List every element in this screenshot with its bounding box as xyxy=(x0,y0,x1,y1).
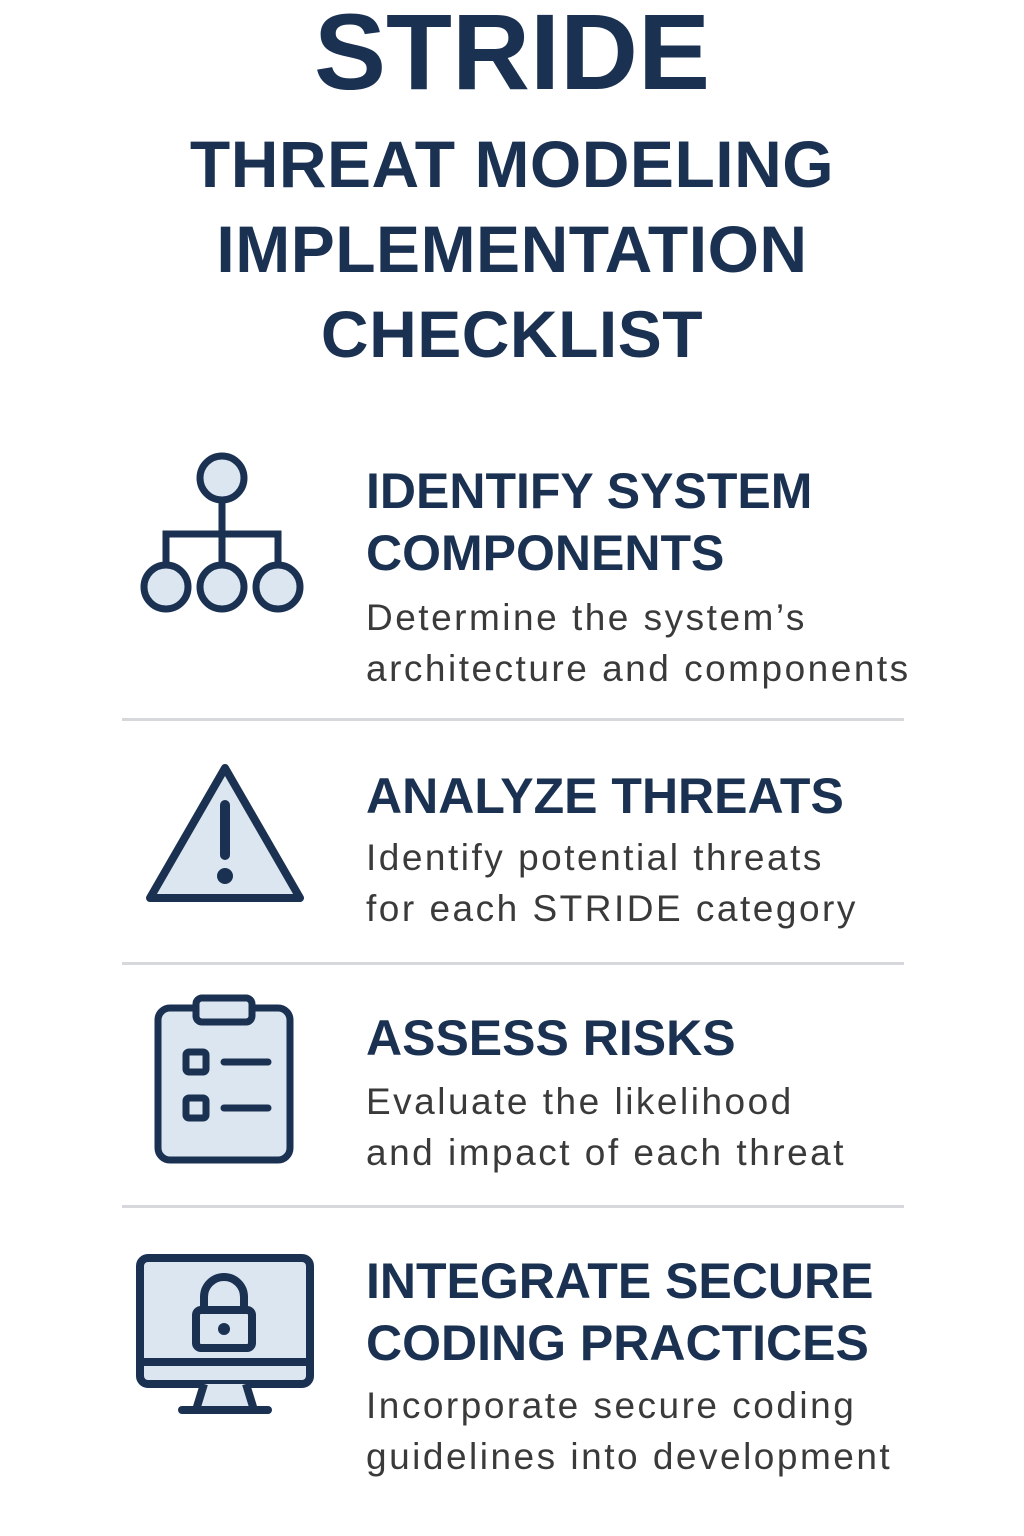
body 2: Identify potential threats xyxy=(366,837,824,878)
section 1 xyxy=(366,463,911,689)
section 3 xyxy=(366,1010,846,1173)
icon: hierarchy xyxy=(140,452,304,612)
body 2: for each STRIDE category xyxy=(366,888,858,929)
body 4: Incorporate secure coding xyxy=(366,1385,856,1426)
heading 4: CODING PRACTICES xyxy=(366,1315,869,1371)
icon: monitor lock xyxy=(136,1254,314,1414)
body 4: guidelines into development xyxy=(366,1436,892,1477)
heading 1 xyxy=(366,463,812,581)
section 2 xyxy=(366,768,858,929)
subtitle: IMPLEMENTATION xyxy=(216,212,808,286)
body 1 xyxy=(366,597,911,689)
icon: warning xyxy=(146,764,304,902)
subtitle: CHECKLIST xyxy=(321,297,703,371)
body 3: and impact of each threat xyxy=(366,1132,846,1173)
body 3 xyxy=(366,1081,846,1173)
heading 2: ANALYZE THREATS xyxy=(366,768,844,824)
body 1: architecture and components xyxy=(366,648,911,689)
section 4 xyxy=(366,1253,892,1477)
body 2 xyxy=(366,837,858,929)
heading 3: ASSESS RISKS xyxy=(366,1010,736,1066)
subtitle: THREAT MODELING xyxy=(190,127,834,201)
heading 4: INTEGRATE SECURE xyxy=(366,1253,873,1309)
body 3: Evaluate the likelihood xyxy=(366,1081,794,1122)
icon: clipboard xyxy=(154,994,294,1164)
body 1: Determine the system’s xyxy=(366,597,807,638)
heading 1: COMPONENTS xyxy=(366,525,724,581)
heading 1: IDENTIFY SYSTEM xyxy=(366,463,812,519)
body 4 xyxy=(366,1385,892,1477)
subtitle xyxy=(190,127,834,371)
heading 4 xyxy=(366,1253,873,1371)
